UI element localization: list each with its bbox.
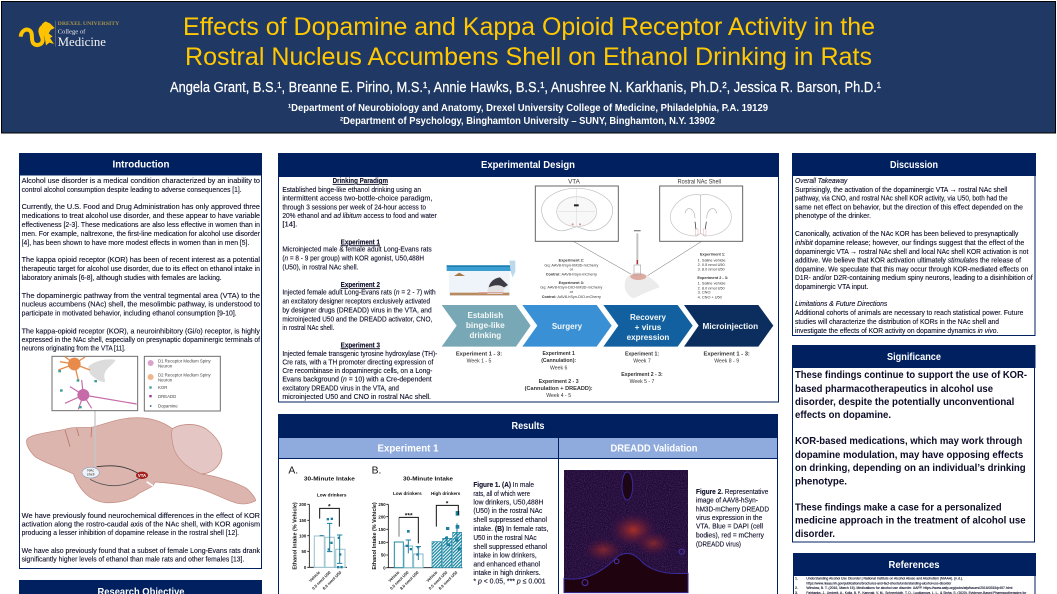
- timeline labels: Week 7: [633, 358, 651, 364]
- heading: discussion: Discussion: [890, 160, 938, 171]
- figure 1 caption: intake. (B) In female rats,: [473, 524, 548, 533]
- icon: rat head and syringe: [573, 230, 702, 298]
- intro text lower: producing a lesser inhibition of dopamine release in the rostral shell [12].: [22, 528, 239, 537]
- methods text: [282, 176, 438, 401]
- reference list: https://www.niaaa.nih.gov/publications/brochures-and-fact-sheets/understanding-alcohol-use-disorder: [806, 582, 952, 586]
- legend: D1 Receptor Medium Spiny: [158, 358, 211, 363]
- methods text: by designer drugs (DREADD) virus in the VTA, and: [282, 305, 432, 314]
- viral vector labels: Control: AAV8-hSyn-mCherry: [546, 272, 597, 276]
- methods text: (U50), in rostral NAc shell.: [282, 262, 358, 271]
- chart B: 200: [378, 514, 386, 519]
- legend: Neuron: [158, 378, 173, 383]
- viral vector labels: [540, 259, 602, 299]
- significance text: dopamine modulation, may have opposing effects: [795, 450, 1024, 461]
- header banner: [2, 2, 1056, 133]
- figure 1 caption: intake in low drinkers,: [473, 551, 537, 560]
- intro text upper: [4], has been shown to have more modest effects in women than in men [5].: [22, 238, 249, 247]
- dose labels: 3. 8.0 nmol U50: [698, 268, 725, 272]
- methods text: (n = 8 - 9 per group) with KOR agonist, U50,488H: [282, 253, 424, 262]
- arrow: recovery and virus expression: expression: [627, 333, 669, 342]
- panel: significance: [792, 345, 1036, 542]
- chart B: 100: [378, 540, 386, 545]
- panel: discussion: [792, 153, 1036, 336]
- heading: results: Results: [512, 421, 545, 432]
- panel: results: [278, 414, 778, 594]
- dose labels: 2. 8.0 nmol U50: [698, 286, 725, 290]
- intro text upper: The dopaminergic pathway from the ventral tegmental area (VTA) to the: [22, 291, 260, 300]
- discussion text: Surprisingly, the activation of the dopaminergic VTA → rostral NAc shell: [795, 185, 1008, 194]
- figure 1 caption: shell suppressed ethanol: [473, 542, 547, 551]
- chart B: 50: [381, 553, 386, 558]
- intro text upper: The kappa opioid receptor (KOR) has been of recent interest as a potential: [22, 255, 260, 264]
- timeline labels: (Cannulation + DREADD):: [525, 386, 593, 392]
- chart B: [372, 465, 462, 591]
- methods text: in rostral NAc shell.: [282, 323, 334, 332]
- panel: experimental design: [278, 153, 779, 402]
- chart B: 250: [378, 502, 386, 507]
- discussion text: investigate the effects of KOR activity on dopamine dynamics in vivo.: [795, 326, 998, 335]
- diagram: experimental timeline: [442, 178, 773, 399]
- methods text: Cre rats, with a TH promoter directing expression of: [282, 357, 434, 366]
- legend: Dopamine: [158, 404, 178, 409]
- chart B: Ethanol Intake (% Vehicle): [372, 502, 378, 570]
- intro text upper: effectiveness [2-3]. These medications are also less effective in women than in: [22, 220, 260, 229]
- chart B: Vehicle: [425, 569, 439, 583]
- significance text: based pharmacotherapeutics in alcohol use: [795, 384, 993, 395]
- title: Rostral Nucleus Accumbens Shell on Ethanol Drinking in Rats: [185, 43, 872, 71]
- chart B: 150: [378, 527, 386, 532]
- significance text: These findings make a case for a personalized: [795, 502, 1002, 513]
- chart A: A.: [288, 465, 298, 476]
- viral vector labels: Gq: AAV8-hSyn-DIO-hM3D-mCherry: [540, 286, 602, 290]
- figure 1 caption: Figure 1. (A) In male: [473, 480, 534, 489]
- panel: research objective: [19, 580, 262, 594]
- reference list: [795, 577, 1027, 594]
- significance text: These findings continue to support the use of KOR-: [795, 370, 1028, 381]
- icon: rat cage: [447, 261, 515, 296]
- chart A: 200: [299, 502, 307, 507]
- methods text: Microinjected male & female adult Long-Evans rats: [282, 245, 432, 254]
- chart A: Ethanol Intake (% Vehicle): [293, 502, 299, 570]
- viral vector labels: Experiment 3:: [559, 281, 584, 285]
- figure 1 caption: low drinkers, U50,488H: [473, 498, 543, 507]
- intro text upper: control alcohol consumption despite leading to adverse consequences [1].: [22, 185, 242, 194]
- discussion text: dopamine. We speculate that this may occur through KOR-mediated effects on: [795, 264, 1028, 273]
- discussion text: [795, 176, 1033, 335]
- figure 2 caption: VTA. Blue = DAPI (cell: [696, 522, 763, 531]
- figure 1 caption: [473, 480, 548, 586]
- dose labels: Experiment 1:: [700, 253, 725, 257]
- discussion text: Additional cohorts of animals are necessary to reach statistical power. Future: [795, 308, 1023, 317]
- logo: Drexel College of Medicine: [21, 21, 120, 49]
- significance text: disorder, despite the potentially unconventional: [795, 397, 1014, 408]
- chart B: 0: [383, 565, 386, 570]
- intro text lower: significantly higher levels of ethanol than male rats and other females [13].: [22, 555, 244, 564]
- significance text: KOR-based medications, which may work through: [795, 436, 1022, 447]
- viral vector labels: or: [570, 267, 574, 271]
- figure 2 caption: Figure 2. Representative: [696, 487, 768, 496]
- methods text: intermittent access two-bottle-choice paradigm,: [282, 194, 432, 203]
- viral vector labels: or: [570, 290, 574, 294]
- dose labels: Experiment 2 - 3:: [697, 276, 728, 280]
- discussion text: pathway, via CNO, and rostral NAc shell KOR activity, via U50, both had the: [795, 194, 1008, 203]
- title: [183, 13, 875, 71]
- intro text upper: participate in motivated behavior, including ethanol consumption [9-10].: [22, 308, 237, 317]
- chart B: Low drinkers: [393, 491, 422, 496]
- discussion text: same net effect on behavior, but the direction of this effect depended on the: [795, 202, 1023, 211]
- methods text: Cre recombinase in dopaminergic cells, on a Long-: [282, 366, 433, 375]
- chart B: Vehicle: [387, 569, 401, 583]
- intro text upper: expressed in the NAc shell, especially on presynaptic dopaminergic terminals of: [22, 335, 261, 344]
- arrow: establish binge-like drinking: binge-like: [466, 321, 505, 330]
- chart B: 8.0 nmol U50: [399, 569, 420, 591]
- arrow: establish binge-like drinking: Establish: [467, 311, 503, 320]
- intro text upper: men. For example, naltrexone, the first-line medication for alcohol use disorder: [22, 229, 260, 238]
- methods text: microinjected U50 and the DREADD activator, CNO,: [282, 314, 432, 323]
- title: Effects of Dopamine and Kappa Opioid Receptor Activity in the: [183, 13, 875, 41]
- chart B: 0.5 nmol U50: [427, 569, 449, 591]
- chart A: 50: [302, 549, 307, 554]
- timeline labels: Experiment 1:: [625, 351, 659, 357]
- panel: references: [793, 553, 1036, 594]
- brain section: rostral NAc shell: [660, 178, 743, 241]
- methods text: Experiment 3: [341, 340, 380, 349]
- arrow: surgery: [522, 305, 612, 347]
- figure 1 caption: and enhanced ethanol: [473, 559, 540, 568]
- chart A: Vehicle: [308, 569, 322, 583]
- intro text lower: We have previously found neurochemical differences in the effect of KOR: [22, 511, 260, 520]
- discussion text: additive. We believe that KOR activation ultimately stimulates the release of: [795, 255, 1022, 264]
- timeline labels: Week 4 - 5: [546, 393, 571, 399]
- chart B: 0.5 nmol U50: [389, 569, 410, 591]
- legend: D2 Receptor Medium Spiny: [158, 373, 211, 378]
- dose labels: 2. 0.5 nmol U50: [698, 263, 725, 267]
- figure 1 caption: (U50) in the rostral NAc: [473, 506, 542, 515]
- dose labels: 3. CNO: [698, 291, 710, 295]
- timeline labels: Experiment 2 - 3: [539, 379, 579, 385]
- figure 2 caption: [696, 487, 769, 549]
- discussion text: phenotype of the drinker.: [795, 211, 871, 220]
- intro text upper: laboratory animals [6-8], although studies with females are lacking.: [22, 273, 222, 282]
- illustration: rat brain and neurons: [27, 356, 256, 504]
- methods text: Drinking Paradigm: [333, 176, 388, 185]
- methods text: Experiment 2: [341, 280, 380, 289]
- discussion text: studies will characterize the distribution of KORs in the NAc shell and: [795, 317, 999, 326]
- chart B: 30-Minute Intake: [403, 477, 453, 483]
- arrow: microinjection: Microinjection: [702, 322, 758, 331]
- reference list: Winslow, B. T. (2016, March 15). Medications for alcohol use disorder. AAFP. https://www.aafp.org/pubs/afp/issues/2016/0315/p457.html: [806, 586, 1013, 590]
- intro text upper: Currently, the U.S. Food and Drug Administration has only approved three: [22, 202, 260, 211]
- arrow: microinjection: [684, 305, 773, 347]
- figure 2 caption: bodies), red = mCherry: [696, 531, 764, 540]
- timeline labels: Experiment 1 - 3:: [456, 351, 502, 357]
- intro text upper: therapeutic target for alcohol use disorder, due to its effect on ethanol intake in: [22, 264, 260, 273]
- dose labels: 1. Saline vehicle: [698, 259, 726, 263]
- discussion text: Canonically, activation of the NAc KOR has been believed to presynaptically: [795, 229, 1018, 238]
- chart B: 8.0 nmol U50: [437, 569, 459, 591]
- timeline labels: Experiment 1: [542, 351, 575, 357]
- illustration: rat brain and neurons: NAc: [87, 469, 94, 473]
- chart A: 100: [299, 533, 307, 538]
- legend: KOR: [158, 385, 167, 390]
- intro text upper: nucleus accumbens (NAc) shell, the mesolimbic pathway, is understood to: [22, 299, 260, 308]
- chart B: ***: [405, 512, 413, 519]
- chart A: Low drinkers: [317, 493, 347, 498]
- arrow: recovery and virus expression: + virus: [635, 323, 662, 332]
- intro text upper: neurons originating from the VTA [11].: [22, 343, 126, 352]
- dose labels: 1. Saline vehicle: [698, 282, 726, 286]
- discussion text: Limitations & Future Directions: [795, 299, 887, 308]
- discussion text: Overall Takeaway: [795, 176, 848, 185]
- significance text: effects on dopamine.: [795, 410, 891, 421]
- affiliations: [288, 102, 768, 127]
- logo: Drexel College of Medicine: DREXEL UNIVERSITY: [58, 22, 120, 27]
- legend: Neuron: [158, 363, 173, 368]
- subheading: DREADD validation: DREADD Validation: [610, 444, 698, 454]
- methods text: Evans background (n = 10) with a Cre-dependent: [282, 375, 432, 384]
- affiliations: ²Department of Psychology, Binghamton University – SUNY, Binghamton, N.Y. 13902: [340, 115, 715, 127]
- timeline labels: Experiment 2 - 3:: [621, 372, 663, 378]
- significance text: medicine approach in the treatment of alcohol use: [795, 516, 1026, 527]
- significance text: on drinking, depending on an individual’s drinking: [795, 463, 1026, 474]
- chart A: 30-Minute Intake: [304, 477, 355, 483]
- illustration: rat brain and neurons: VTA: [138, 473, 147, 478]
- heading: references: References: [888, 560, 940, 571]
- arrow: establish binge-like drinking: drinking: [469, 331, 501, 340]
- brain section: rostral NAc shell: Rostral NAc Shell: [678, 178, 721, 185]
- reference list: 2.: [795, 586, 798, 590]
- methods text: Injected female transgenic tyrosine hydroxylase (TH)-: [282, 349, 438, 358]
- reference list: Understanding Alcohol Use Disorder | National Institute on Alcohol Abuse and Alcoholism (NIAAA). (n.d.).: [806, 577, 963, 581]
- heading: introduction: Introduction: [112, 160, 170, 170]
- chart B: High drinkers: [431, 491, 461, 496]
- significance text: phenotype.: [795, 476, 847, 487]
- figure 1 caption: shell suppressed ethanol: [473, 515, 547, 524]
- significance text: [795, 370, 1028, 540]
- methods text: excitatory DREADD virus in the VTA, and: [282, 383, 399, 392]
- subheading: experiment 1: Experiment 1: [378, 444, 439, 454]
- chart B: B.: [372, 465, 381, 476]
- figure 2 caption: (DREADD virus): [696, 540, 741, 549]
- arrow: recovery and virus expression: [603, 305, 693, 347]
- timeline labels: Week 1 - 5: [467, 358, 492, 364]
- figure 2 caption: virus expression in the: [696, 513, 762, 522]
- methods text: Established binge-like ethanol drinking using an: [282, 185, 421, 194]
- discussion text: inhibit dopamine release; however, our findings suggest that the effect of the: [795, 238, 1024, 247]
- affiliations: ¹Department of Neurobiology and Anatomy, Drexel University College of Medicine, Philadelphia, P.A. 19129: [288, 102, 768, 114]
- timeline labels: Week 5 - 7: [630, 379, 655, 385]
- timeline labels: [456, 351, 750, 399]
- intro text upper: medications to treat alcohol use disorder, and these appear to have variable: [22, 211, 260, 220]
- figure 1 caption: U50 in the rostral NAc: [473, 533, 537, 542]
- arrow: surgery: Surgery: [552, 322, 583, 331]
- timeline labels: Week 6: [550, 365, 567, 371]
- methods text: through 3 sessions per week of 24-hour access to: [282, 202, 426, 211]
- viral vector labels: Gq: AAV8-hSyn-hM3D-mCherry: [544, 263, 598, 267]
- chart A: 8.0 nmol U50: [321, 569, 343, 591]
- arrow: recovery and virus expression: Recovery: [630, 313, 667, 322]
- legend: DREADD: [158, 394, 176, 399]
- methods text: [14].: [282, 220, 297, 229]
- figure 1 caption: intake in high drinkers.: [473, 568, 541, 577]
- chart A: *: [328, 504, 331, 511]
- intro text lower: We have also previously found that a subset of female Long-Evans rats drank: [22, 546, 260, 555]
- chart A: 150: [299, 518, 307, 523]
- intro text lower: [22, 511, 260, 564]
- intro text upper: Alcohol use disorder is a medical condition characterized by an inability to: [22, 176, 260, 185]
- panel: introduction: [19, 153, 262, 568]
- heading: experimental design: Experimental Design: [481, 160, 575, 171]
- methods text: Injected female adult Long-Evans rats (n = 2 - 7) with: [282, 288, 436, 297]
- brain section: VTA: [535, 178, 618, 241]
- logo: Drexel College of Medicine: College of: [58, 28, 86, 35]
- intro text lower: activation along the rostro-caudal axis of the NAc shell, with KOR agonism: [22, 519, 260, 528]
- intro text upper: The kappa-opioid receptor (KOR), a neuroinhibitory (Gi/o) receptor, is highly: [22, 326, 260, 335]
- methods text: 20% ethanol and ad libitum access to food and water: [282, 211, 437, 220]
- arrow: establish binge-like drinking: [442, 305, 531, 347]
- figure 2 caption: image of AAV8-hSyn-: [696, 496, 758, 505]
- chart A: [288, 465, 355, 591]
- intro text upper: [22, 176, 261, 352]
- methods text: an excitatory designer receptors exclusively activated: [282, 296, 430, 305]
- significance text: disorder.: [795, 529, 835, 540]
- reference list: 1.: [795, 577, 798, 581]
- figure 2 caption: hM3D-mCherry DREADD: [696, 504, 769, 513]
- neuron inset: [52, 356, 138, 411]
- figure 2: fluorescence micrograph: [564, 470, 688, 593]
- heading: significance: Significance: [887, 352, 942, 363]
- timeline labels: Week 8 - 9: [714, 358, 739, 364]
- logo: Drexel College of Medicine: Medicine: [58, 35, 106, 49]
- chart A: 0.5 nmol U50: [311, 569, 332, 591]
- chart A: 0: [304, 565, 307, 570]
- viral vector labels: Experiment 2:: [559, 259, 584, 263]
- methods text: Experiment 1: [341, 237, 381, 246]
- dose labels: 4. CNO + U50: [698, 295, 722, 299]
- discussion text: dopaminergic VTA input.: [795, 282, 868, 291]
- viral vector labels: Control: AAV8-hSyn-DIO-mCherry: [542, 295, 601, 299]
- timeline labels: Experiment 1 - 3:: [703, 351, 750, 357]
- timeline labels: (Cannulation):: [541, 358, 576, 364]
- brain section: VTA: VTA: [568, 178, 581, 185]
- illustration: rat brain and neurons: shell: [87, 473, 95, 477]
- legend: [144, 356, 220, 411]
- chart B: *: [446, 501, 449, 508]
- figure 1 caption: * p < 0.05, *** p ≤ 0.001: [473, 577, 546, 586]
- methods text: microinjected U50 and CNO in rostral NAc shell.: [282, 392, 431, 401]
- figure 1 caption: rats, all of which were: [473, 489, 530, 498]
- authors: Angela Grant, B.S.¹, Breanne E. Pirino, M.S.¹, Annie Hawks, B.S.¹, Anushree N. Karkhanis, Ph.D.², Jessica R. Barson, Ph.D.¹: [170, 80, 881, 96]
- dose labels: [697, 253, 728, 299]
